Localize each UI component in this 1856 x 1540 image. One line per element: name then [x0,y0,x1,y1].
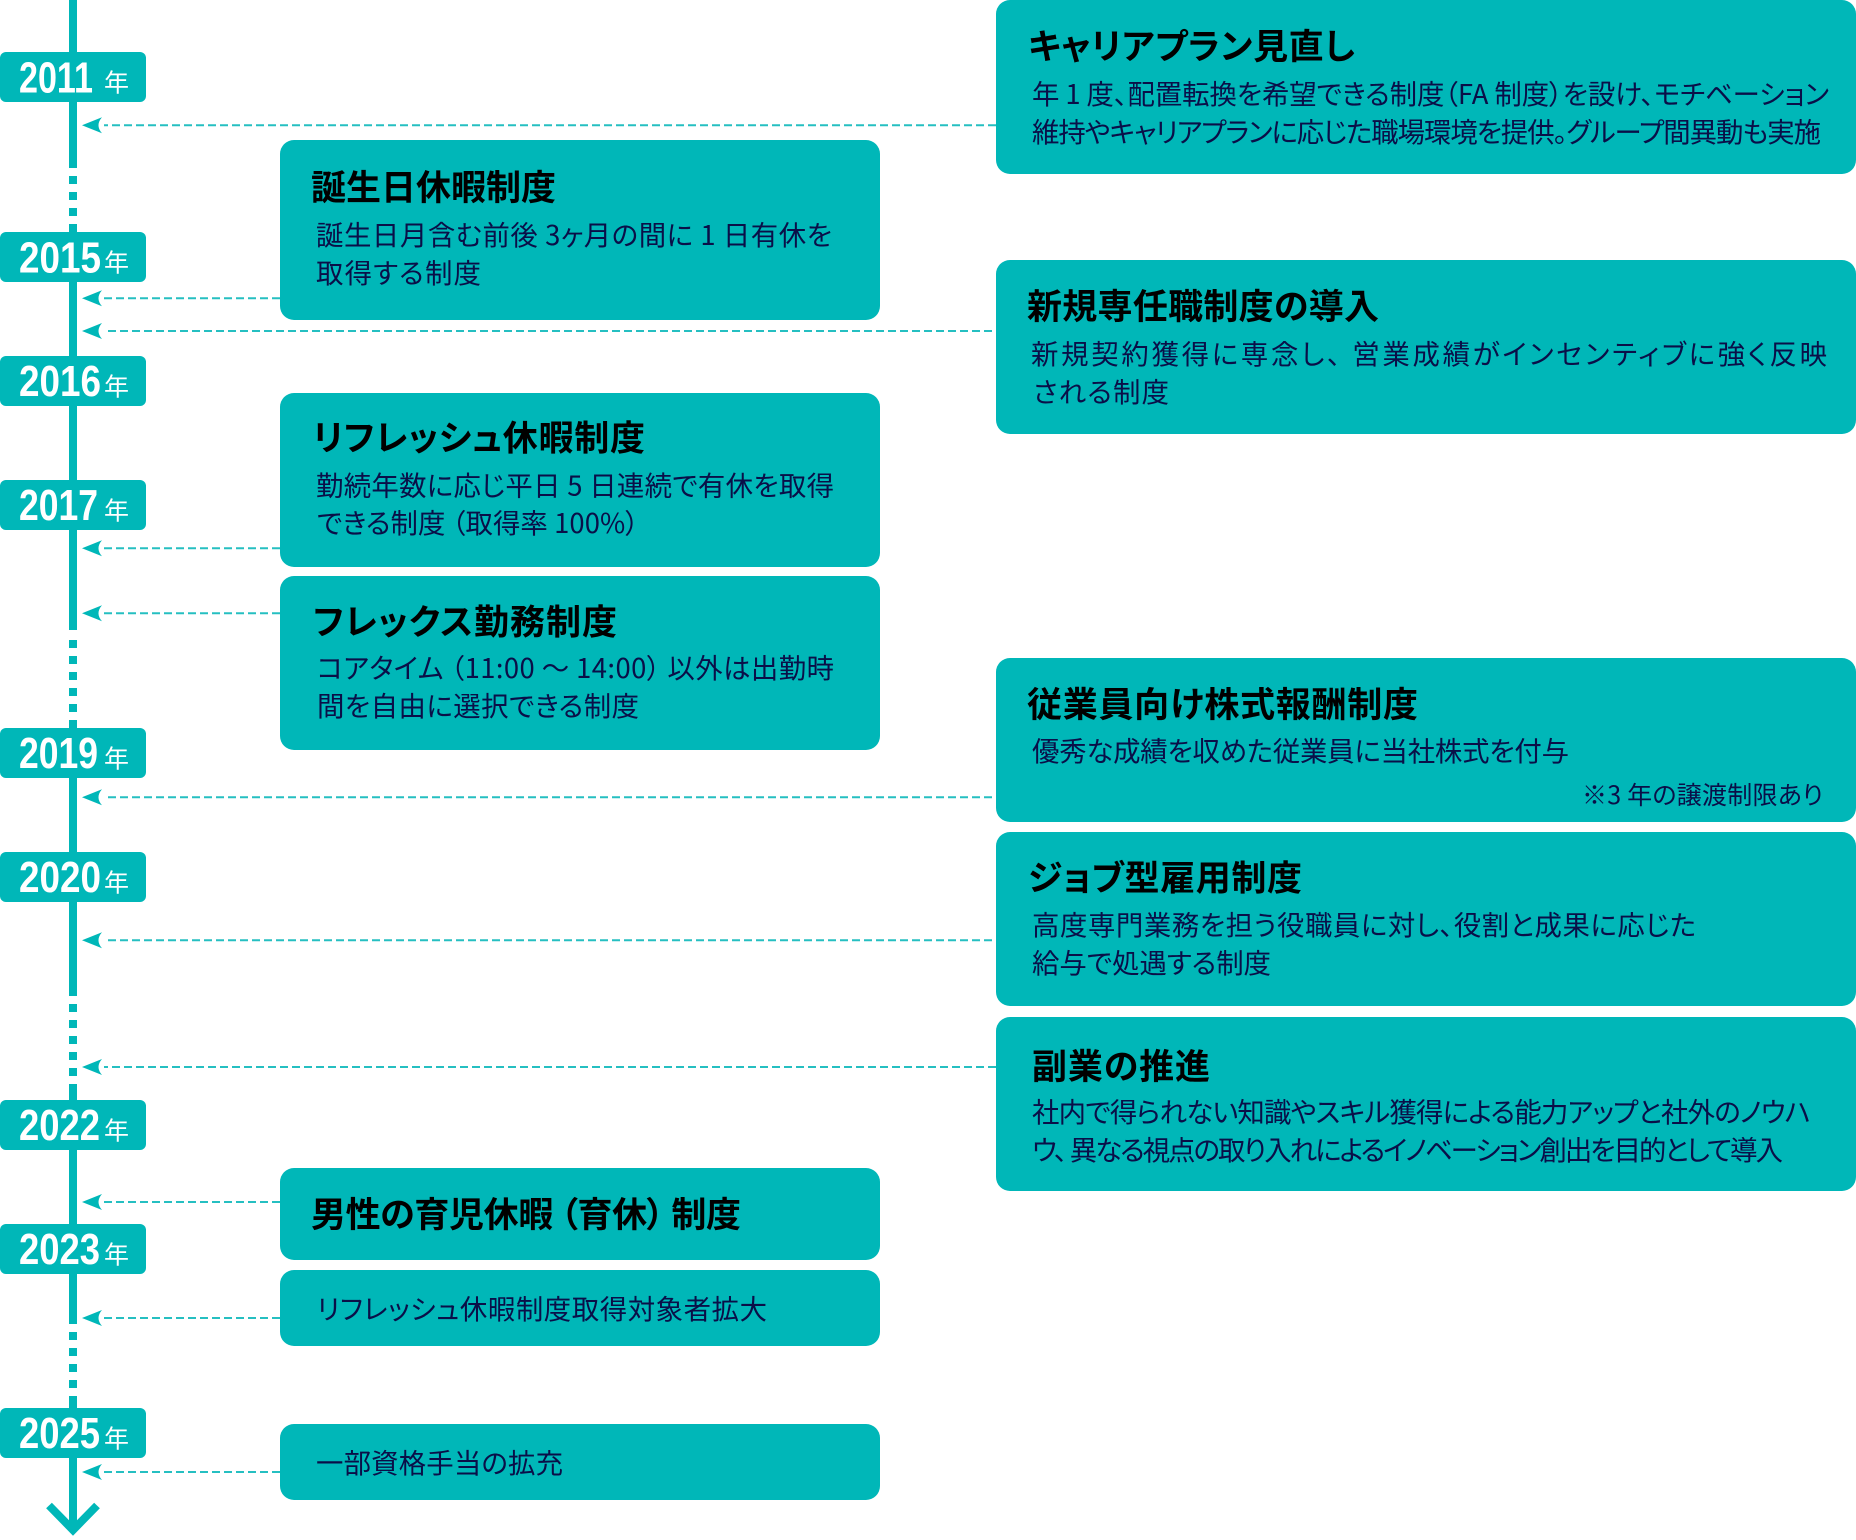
heading: employee stock compensation: 従業員向け株式報酬制度 [1027,677,1418,728]
arrow: qualification allowance to 2025 [82,1464,280,1480]
heading: career plan review: キャリアプラン見直し [1028,19,1355,70]
text: employee stock description: 優秀な成績を収めた従業員に当社株式を付与 [1032,729,1569,769]
text: job-based description: 高度専門業務を担う役職員に対し、役割と成果に応じた [1032,903,1696,943]
year badge: 2019 [0,728,146,778]
arrow: parental leave to 2022 [82,1194,280,1210]
arrow: refresh leave to 2017 [82,540,280,556]
panel: refresh leave [280,393,880,567]
panel: career plan review [996,0,1856,174]
text: flex work description: コアタイム （11:00 ～ 14:00） 以外は出勤時 [317,646,834,686]
text: sales specialist description [1031,332,1827,410]
heading: sales specialist position: 新規専任職制度の導入 [1027,279,1379,330]
text: career plan review description [1032,72,1829,150]
panel: birthday leave [280,140,880,320]
text: birthday leave description: 誕生日月含む前後 3ヶ月の間に 1 日有休を [316,213,832,253]
text: flex work description: 間を自由に選択できる制度 [317,684,639,724]
year badge: 2022 [0,1100,146,1150]
year badge: 2023 [0,1224,146,1274]
heading: flex work: フレックス勤務制度 [313,594,617,646]
arrow: sales position to 2015 [82,323,992,339]
panel: qualification allowance [280,1424,880,1500]
arrow: job-based employment to 2020 [82,932,992,948]
arrow: flex work to 2017 [82,605,280,621]
text: side job description [1032,1090,1811,1168]
arrow: birthday leave to 2015 [82,290,280,306]
year badge: 2015: 2015 [19,234,101,283]
year badge: 2022: 2022 [19,1101,100,1150]
text: career plan review description: 年 1 度、配置転換を希望できる制度（FA 制度）を設け、モチベーション [1032,72,1829,112]
panel: sales specialist position [996,260,1856,434]
panel: male parental leave [280,1168,880,1260]
panel: job-based employment [996,832,1856,1006]
year badge: 2015: 年 [104,244,129,280]
heading: refresh leave: リフレッシュ休暇制度 [313,410,645,462]
text: job-based description: 給与で処遇する制度 [1032,941,1271,981]
year badge: 2016 [0,356,146,406]
text: job-based description [1032,903,1696,981]
text: refresh leave description: できる制度 （取得率 100%） [317,501,639,541]
year badge: 2025 [0,1408,146,1458]
year badge: 2011 [0,52,146,103]
year badge: 2025: 2025 [19,1409,100,1458]
text: refresh leave expansion: リフレッシュ休暇制度取得対象者拡大 [317,1287,767,1327]
arrow: timeline end chevron [49,1506,97,1530]
arrow: refresh leave expansion to 2023 [82,1310,280,1326]
year badge: 2020 [0,852,146,902]
text: career plan review description: 維持やキャリアプランに応じた職場環境を提供。グループ間異動も実施 [1032,110,1821,150]
year badge: 2011: 2011 [19,54,93,103]
year badge: 2022: 年 [104,1112,129,1148]
year badge: 2016: 2016 [19,357,101,406]
arrow: career plan to 2011 [82,117,996,133]
arrow: stock compensation to 2019 [82,789,992,805]
year badge: 2019: 年 [104,740,129,776]
text: birthday leave description: 取得する制度 [316,251,481,291]
timeline axis [69,0,77,1530]
text: sales specialist description: 新規契約獲得に専念し、 営業成績がインセンティブに強く反映 [1031,332,1827,372]
text: qualification allowance: 一部資格手当の拡充 [316,1441,563,1481]
note: transfer restriction: ※3 年の譲渡制限あり [1582,776,1823,812]
year badge: 2017 [0,480,146,530]
panel: employee stock compensation [996,658,1856,822]
year badge: 2017: 2017 [19,481,98,530]
year badge: 2016: 年 [104,368,129,404]
year badge: 2017: 年 [104,492,129,528]
heading: birthday leave: 誕生日休暇制度 [311,160,556,211]
year badge: 2015 [0,232,146,283]
year badge: 2023: 年 [104,1236,129,1272]
panel: flex work [280,576,880,750]
year badge: 2023: 2023 [19,1225,100,1274]
panel: refresh leave expansion [280,1270,880,1346]
text: birthday leave description [316,213,832,291]
heading: side job promotion: 副業の推進 [1032,1039,1210,1090]
text: sales specialist description: される制度 [1033,370,1169,410]
arrow: side job to timeline [82,1059,996,1075]
heading: male parental leave: 男性の育児休暇 （育休） 制度 [311,1187,741,1238]
year badge: 2011: 年 [104,64,129,100]
year badge: 2020: 2020 [19,853,101,902]
text: refresh leave description [316,464,834,541]
year badge: 2020: 年 [104,864,129,900]
text: side job description: 社内で得られない知識やスキル獲得による能力アップと社外のノウハ [1032,1090,1811,1130]
year badge: 2019: 2019 [19,729,98,778]
text: flex work description [317,646,834,724]
heading: job-based employment: ジョブ型雇用制度 [1028,850,1302,902]
year badge: 2025: 年 [104,1420,129,1456]
text: refresh leave description: 勤続年数に応じ平日 5 日連続で有休を取得 [316,464,834,504]
text: side job description: ウ、 異なる視点の取り入れによるイノベーション創出を目的として導入 [1032,1128,1783,1168]
panel: side job promotion [996,1017,1856,1191]
